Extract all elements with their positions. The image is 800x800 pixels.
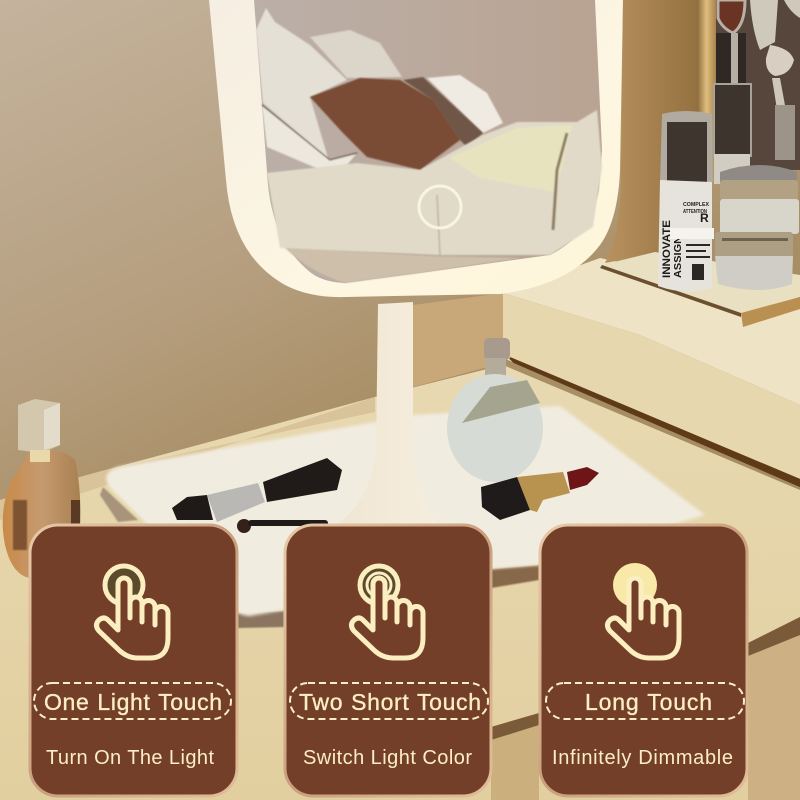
desk surface — [0, 365, 800, 800]
gold frame strip — [697, 0, 716, 170]
description: Turn On The Light — [46, 747, 214, 769]
reflected back pillow — [310, 30, 402, 78]
card background — [540, 525, 747, 796]
dark bottle behind — [714, 84, 751, 184]
reflected brown cushions — [310, 77, 483, 170]
heading: Long Touch — [585, 689, 712, 715]
white vanity tray — [106, 406, 705, 616]
panel: long touch — [540, 525, 747, 796]
card background — [30, 525, 237, 796]
heading: One Light Touch — [44, 689, 222, 715]
description: Switch Light Color — [303, 747, 472, 769]
brown wall to right of mirror — [605, 0, 700, 263]
reflected bed — [267, 110, 602, 283]
tray drop shadows — [100, 487, 539, 628]
bottle label text: ASSIGN — [673, 236, 684, 278]
bottle label text: COMPLEX — [683, 202, 710, 208]
serum bottle with label — [658, 111, 714, 292]
icon: long press hand — [608, 563, 679, 658]
recess wall behind stand — [413, 293, 503, 387]
cosmetic jars — [715, 165, 799, 290]
small acrylic tray — [600, 252, 800, 327]
panel: two short touch — [285, 525, 491, 796]
icon: double tap hand — [352, 566, 423, 658]
makeup brush — [172, 458, 342, 522]
small applicator brush — [237, 519, 328, 533]
bottle label text: R — [700, 211, 709, 225]
perfume bottle left — [3, 399, 80, 578]
lipstick — [481, 467, 599, 520]
raised shelf block — [503, 258, 800, 486]
mirror frame — [209, 0, 623, 297]
round perfume bottle — [447, 338, 543, 482]
card background — [285, 525, 491, 796]
heading: Two Short Touch — [299, 689, 481, 715]
touch sensor ring — [419, 186, 461, 228]
bottle label text: ATTENTION — [683, 209, 707, 215]
dark cabinet with organizer items — [716, 0, 800, 170]
description: Infinitely Dimmable — [552, 747, 733, 769]
bottle label text — [661, 202, 710, 278]
dashed label pill — [546, 683, 744, 719]
panel: one light touch — [30, 525, 237, 796]
mirror glass with bed reflection — [254, 0, 602, 283]
desk lower front edges — [491, 617, 800, 800]
dashed label pill — [290, 683, 488, 719]
bottle label text: INNOVATE — [661, 220, 673, 278]
stand neck — [335, 302, 440, 526]
reflected white pillows — [256, 8, 503, 177]
dashed label pill — [34, 683, 231, 719]
icon: single tap hand — [96, 566, 168, 658]
